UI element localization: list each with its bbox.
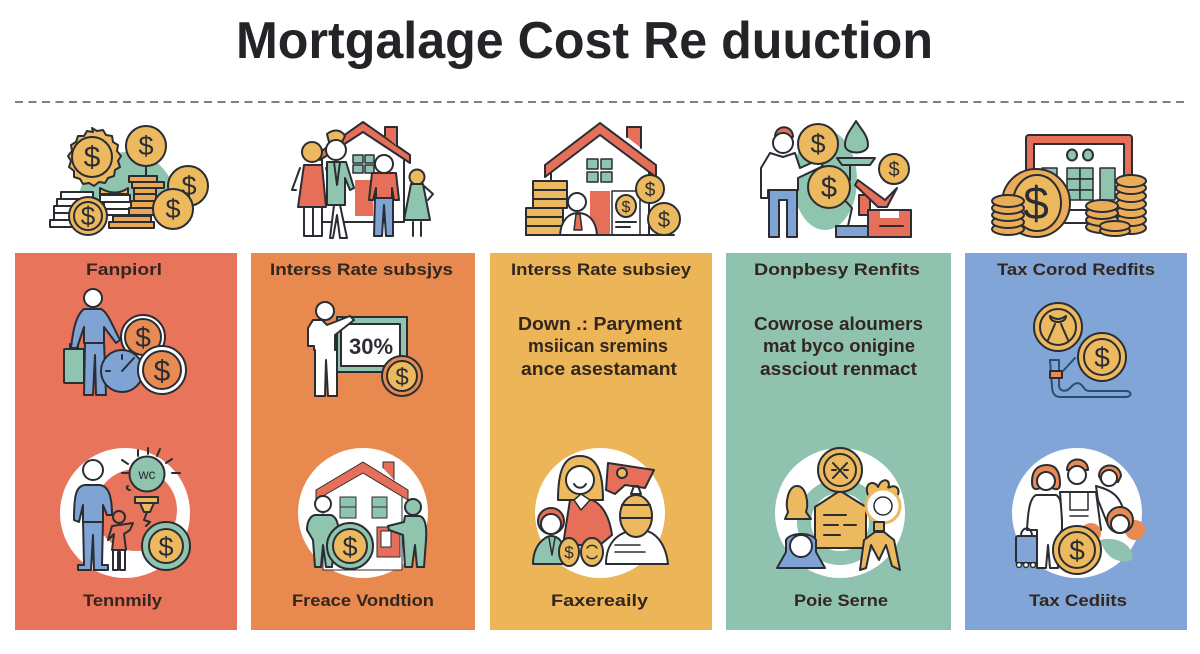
icon: coin, document, clock and people [775, 448, 905, 578]
icon: coins and stacks: $ [81, 201, 96, 231]
text block: yellow panel: msiican sremins [528, 336, 668, 356]
panel: orange [251, 253, 475, 630]
text block: yellow panel: ance asestamant [521, 359, 677, 379]
icon: presenter with 30% board: $ [395, 364, 409, 391]
panel: coral [15, 253, 237, 630]
label: coral panel bottom: Tennmily [83, 591, 163, 610]
icon: house with banker: $ [645, 180, 656, 201]
icon: coins and stacks: $ [181, 171, 197, 201]
icon: team with coin and bag [1012, 448, 1145, 578]
text block: teal panel [754, 314, 923, 379]
icon: family and house [292, 122, 433, 238]
title: Mortgalage Cost Re duuction [236, 12, 933, 70]
text block: teal panel: mat byco onigine [763, 336, 915, 356]
heading: teal panel: Donpbesy Renfits [754, 260, 920, 279]
heading: yellow panel: Interss Rate subsiey [511, 260, 692, 279]
icon: person with coins and scale: $ [821, 172, 837, 204]
icon: coins with pipe: $ [1094, 342, 1110, 373]
icon: person with clock and coins [64, 289, 186, 395]
icon: monitor with coin stacks: $ [1023, 177, 1049, 229]
label: blue panel bottom: Tax Cediits [1029, 591, 1127, 610]
panel: blue [965, 253, 1187, 630]
icon: mother, child, coins and document [533, 448, 668, 578]
icon: house with two people and coin [298, 448, 428, 578]
icon: team with coin and bag: $ [1069, 535, 1085, 566]
text block: teal panel: Cowrose aloumers [754, 314, 923, 334]
label: yellow panel bottom: Faxereaily [551, 591, 649, 610]
icon: presenter with 30% board: 30% [349, 334, 393, 359]
panel: teal [726, 253, 951, 630]
icon: coins and stacks: $ [165, 194, 181, 224]
icon: person with coins and scale: $ [888, 159, 900, 181]
icon: person with clock and coins: $ [154, 355, 171, 388]
text block: yellow panel: Down .: Paryment [518, 314, 682, 334]
icon: mother, child, coins and document: $ [564, 543, 574, 562]
icon: monitor with coin stacks [992, 135, 1146, 237]
panel: yellow [490, 253, 712, 630]
icon: house with banker: $ [658, 207, 670, 232]
icon: circle with parent, child, bulb and coin: $ [158, 532, 174, 562]
label: teal panel bottom: Poie Serne [794, 591, 888, 610]
icon: house with banker [526, 123, 680, 235]
label: orange panel bottom: Freace Vondtion [292, 591, 434, 610]
icon: circle with parent, child, bulb and coin [60, 448, 190, 578]
icon: person with coins and scale: $ [810, 129, 826, 159]
icon: house with banker: $ [622, 199, 631, 216]
icon: coins and stacks: $ [84, 141, 101, 174]
text block: teal panel: assciout renmact [760, 359, 917, 379]
icon: coins and stacks [50, 126, 208, 235]
icon: person with coins and scale [761, 121, 911, 237]
icon: coins with pipe [1034, 303, 1130, 397]
heading: coral panel: Fanpiorl [86, 260, 162, 279]
heading: blue panel: Tax Corod Redfits [997, 260, 1155, 279]
icon: coins and stacks: $ [138, 131, 154, 161]
heading: orange panel: Interss Rate subsjys [270, 260, 453, 279]
icon: person with clock and coins: $ [135, 322, 151, 353]
icon: presenter with 30% board [308, 302, 422, 396]
text block: yellow panel [518, 314, 682, 379]
icon: house with two people and coin: $ [342, 532, 358, 562]
icon: circle with parent, child, bulb and coin: wc [137, 466, 156, 482]
